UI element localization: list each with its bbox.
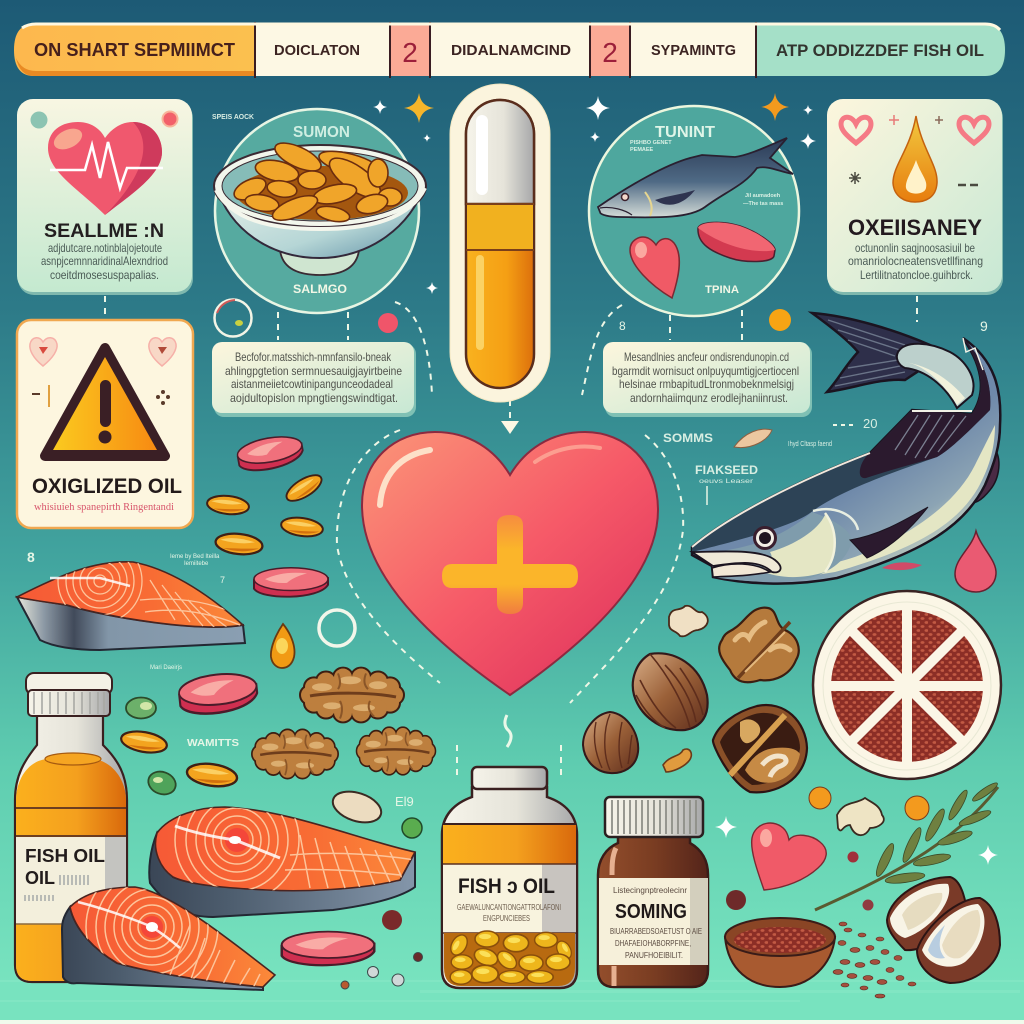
info box left: ahlingpgtetion sermnuesauigjayirtbeine	[225, 364, 402, 378]
title: OXIGLIZED OIL	[32, 475, 182, 498]
fish oil jar: GAEWALUNCANTIONGATTROLAFONI	[457, 903, 561, 912]
title: OXEIISANEY	[848, 215, 982, 240]
brown bottle: BIUARRABEDSOAETUST O AIE	[610, 927, 702, 936]
capsule	[450, 84, 550, 402]
panel text: adjdutcare.notinbla|ojetoute	[48, 241, 162, 255]
fish oil bottle left	[15, 673, 127, 982]
small caption: PEMAEE	[630, 147, 654, 153]
pale rear back	[897, 344, 973, 408]
small marginal labels: El9	[395, 794, 414, 809]
capsules in jar	[447, 931, 574, 984]
seed bowl	[725, 918, 835, 987]
small droplets bottom	[341, 952, 422, 989]
info box left: aojdultopislon mpngtiengswindtigat.	[230, 391, 398, 405]
icon: heart with heartbeat	[48, 122, 163, 215]
herb sprig	[815, 781, 999, 910]
small caption: Jil aumadoeh	[745, 193, 781, 199]
body	[692, 338, 1000, 584]
oil drop red	[955, 531, 996, 592]
segment: orange start: ON SHART SEPMIIMCT	[34, 40, 235, 60]
segment: number 2	[390, 24, 430, 76]
icon: warning triangle	[45, 348, 165, 456]
label: Listecingnptreolecinr	[613, 886, 687, 895]
bowl base	[280, 250, 359, 275]
label: TPINA	[705, 284, 739, 296]
info box left: aistanmeiietcowtinipangunceodadeal	[231, 377, 393, 391]
labels: somms and flakseed: Ihyd Cltasp faend	[788, 441, 832, 448]
panel text: asnpjcemnnaridinalAlexndriod	[41, 254, 168, 268]
salmon steak large	[148, 806, 416, 918]
text	[848, 241, 983, 282]
ground shadow stripes	[0, 980, 1024, 1002]
tuna meat	[698, 222, 775, 262]
circle: tuna	[589, 106, 799, 316]
big fish	[692, 313, 1000, 584]
icon: outline hearts	[841, 117, 989, 143]
icon: oil drop	[893, 116, 937, 202]
arrow to heart	[501, 421, 519, 434]
head lower	[712, 512, 852, 582]
big heart with plus	[362, 432, 658, 695]
meat slice top	[236, 433, 305, 474]
small pale nut	[669, 606, 708, 636]
label: SUMON	[293, 124, 350, 141]
segment: step 1: DOICLATON	[274, 42, 360, 59]
small caption: PISHBO GENET	[630, 140, 672, 146]
label: FISH ɔ OIL	[458, 875, 555, 898]
small decorations: sparkles and dots	[211, 93, 816, 509]
icon: red dot	[162, 112, 178, 126]
ring	[319, 610, 355, 646]
labels: somms and flakseed: SOMMS	[663, 431, 713, 445]
tuna fish	[598, 138, 793, 217]
capsules in bowl	[231, 137, 402, 225]
small heart bottom	[752, 823, 826, 890]
caption: species: SPEIS AOCK	[212, 112, 255, 121]
scattered seeds	[833, 922, 916, 998]
salmon steak lower	[61, 886, 276, 991]
segment: step 1	[255, 24, 390, 76]
info box right: helsinae rmbapitudLtronmobeknmelsigj	[619, 377, 794, 391]
segment: teal end	[756, 24, 1005, 76]
labels: somms and flakseed: FIAKSEED	[695, 465, 758, 477]
small marginal labels: 7	[220, 575, 225, 585]
panel text: coeitdmosesuspapalias.	[50, 268, 159, 282]
top navigation bar	[14, 22, 1006, 78]
small heart	[630, 237, 679, 298]
panel title: SEALLME :N	[44, 221, 164, 242]
pectoral fin	[850, 507, 928, 558]
small nut piece	[663, 749, 691, 772]
small marginal labels: Mari Daeirjs	[150, 665, 182, 671]
side fin	[965, 448, 999, 503]
nuts and green capsules	[126, 698, 422, 930]
info box left	[212, 342, 416, 417]
panel: heart health	[17, 99, 193, 295]
panel: oxidized oil warning	[17, 320, 193, 528]
walnut whole large	[633, 653, 708, 730]
small caption	[630, 140, 783, 207]
brown bottle: DHAFAEIOHABORPFINE,	[615, 939, 691, 948]
text: omanriolocneatensvetllfinang	[848, 254, 983, 268]
small marginal labels: 9	[980, 318, 988, 334]
segment: number 2 second	[590, 24, 630, 76]
text: octunonlin saqjnoosasiuil be	[855, 241, 975, 255]
segment: step 3	[630, 24, 756, 76]
nut small	[583, 712, 638, 773]
coconut halves	[887, 877, 1000, 983]
circle: salmon bowl	[214, 109, 426, 313]
brown bottle	[598, 797, 708, 987]
dorsal rays	[895, 415, 966, 458]
info box left: Becfofor.matsshich-nmnfansilo-bneak	[235, 350, 392, 364]
brown bottle: PANUFHOEIBILIT.	[625, 951, 683, 960]
segment: number 2 second: 2	[602, 37, 618, 68]
info box right	[603, 342, 812, 417]
ventral fin	[882, 562, 922, 570]
bowl rim front	[216, 188, 425, 229]
small marginal labels: 8	[619, 319, 626, 333]
icon: small marks	[849, 115, 978, 185]
label: TUNINT	[655, 124, 715, 141]
subtitle: whisiuieh spanepirth Ringentandi	[34, 501, 174, 513]
small steam mark	[505, 715, 511, 747]
info box right: Mesandlnies ancfeur ondisrendunopin.cd	[624, 350, 789, 364]
labels: somms and flakseed	[663, 416, 877, 505]
labels: somms and flakseed: oeuvs Leaser	[699, 479, 753, 485]
meat slices	[178, 568, 374, 965]
panel text	[41, 241, 168, 282]
plus sign	[442, 515, 578, 614]
small marginal labels	[27, 318, 988, 809]
small marginal labels: Iemiitebe	[184, 561, 209, 567]
dark upper band	[692, 338, 990, 552]
pale belly edge	[720, 425, 995, 577]
small decoration bottom right	[715, 787, 998, 910]
fish oil jar: ENGPUNCIEBES	[483, 914, 530, 923]
segment: step 3: SYPAMINTG	[651, 42, 736, 59]
tail root detail	[963, 338, 983, 370]
small marginal labels: Ieme by Bed Iteilla	[170, 554, 220, 560]
segment: orange start	[14, 24, 255, 76]
eye	[753, 526, 777, 550]
segment: number 2: 2	[402, 37, 418, 68]
oil capsules scattered	[120, 470, 325, 789]
segment: step 2	[430, 24, 590, 76]
info box right: andornhaiimqunz erodlejhaniinrust.	[630, 391, 788, 405]
icon: small hearts	[30, 338, 176, 366]
text: Lertilitnatoncloe.guihbrck.	[860, 268, 973, 282]
bowl	[216, 186, 424, 258]
labels: somms and flakseed: 20	[863, 416, 877, 431]
icon: teal dot	[30, 112, 48, 128]
small caption: —The tas mass	[743, 201, 783, 207]
walnut piece top	[719, 608, 799, 682]
brown bottle: SOMING	[615, 901, 687, 923]
mouth	[692, 551, 781, 572]
fish oil jar	[442, 767, 577, 988]
flaxseed disc	[813, 591, 1001, 779]
label: SALMGO	[293, 282, 347, 296]
label: walnuts: WAMITTS	[187, 738, 239, 749]
panel: oxidation drop	[827, 99, 1003, 295]
tail	[812, 313, 930, 392]
segment: step 2: DIDALNAMCIND	[451, 42, 571, 59]
small marginal labels: 8	[27, 549, 35, 565]
capsule upright	[271, 624, 295, 668]
walnut half open	[713, 705, 807, 792]
segment: teal end: ATP ODDIZZDEF FISH OIL	[776, 41, 984, 60]
dashed connectors	[105, 296, 917, 775]
salmon steak top	[14, 561, 246, 651]
fish oil bottle left: OIL	[25, 868, 55, 888]
walnuts left	[253, 669, 435, 778]
icons: small marks	[32, 385, 170, 407]
info box right: bgarmdit wornisuct onlpuyqumtigjcertiocenl	[612, 364, 799, 378]
label: FISH OIL	[25, 846, 105, 866]
